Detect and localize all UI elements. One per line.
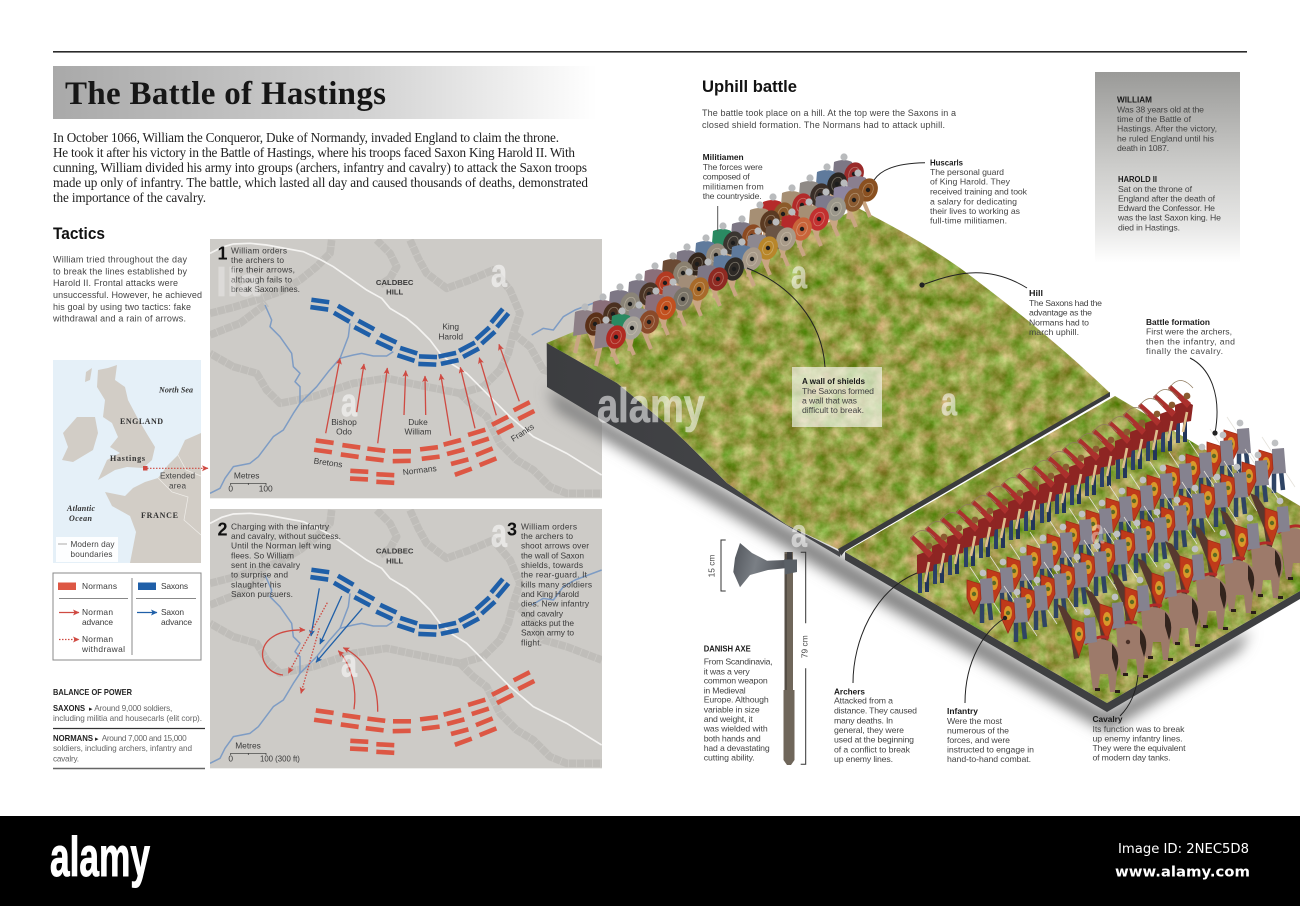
callout: militiamen: militiamen from — [703, 181, 764, 191]
harold — [1117, 175, 1221, 232]
callout: huscarls: full-time militiamen. — [930, 216, 1007, 226]
legend: Norman — [82, 634, 113, 644]
step 3 text: William orders — [521, 521, 577, 531]
callout: hill: march uphill. — [1029, 327, 1079, 337]
top rule — [53, 51, 1247, 53]
watermarks: lla — [216, 261, 261, 305]
tactics text — [52, 255, 202, 324]
saxon shield wall — [573, 153, 881, 366]
step 2 text: Until the Norman left wing — [231, 541, 331, 551]
william: time of the Battle of — [1117, 114, 1192, 124]
modern boundaries — [158, 455, 201, 535]
callout: cavalry: of modern day tanks. — [1092, 752, 1170, 762]
callout: battle formation — [1146, 318, 1235, 436]
hill label: CALDBEC — [376, 547, 414, 556]
callout: infantry: instructed to engage in — [947, 744, 1034, 754]
william: Hastings. After the victory, — [1117, 124, 1217, 134]
callout: huscarls: their lives to working as — [930, 206, 1021, 216]
heading: uphill battle: Uphill battle — [702, 78, 797, 96]
callout: militiamen: The forces were — [703, 162, 763, 172]
place names: Hastings — [110, 454, 145, 463]
step 3 text: flight. — [521, 637, 542, 647]
footer band — [0, 816, 1300, 906]
panel: map 1 — [210, 239, 602, 498]
callout: infantry: forces, and were — [947, 735, 1010, 745]
harold: HAROLD II — [1118, 175, 1157, 184]
map labels: Harold — [438, 331, 463, 341]
step 3 text: dies. New infantry — [521, 599, 590, 609]
place names: North Sea — [158, 386, 193, 394]
callout: battle formation: finally the cavalry. — [1146, 346, 1223, 356]
callout: militiamen: the countryside. — [703, 191, 762, 201]
flat block grass — [845, 396, 1300, 703]
map labels: Bishop — [331, 417, 357, 427]
modern boundaries key: boundaries — [70, 550, 112, 559]
watermarks: a — [1091, 513, 1105, 551]
callout: archers: distance. They caused — [834, 706, 917, 716]
balance of power: cavalry. — [53, 754, 79, 764]
uphill text: The battle took place on a hill. At the top were the Saxons in a — [702, 108, 956, 118]
balance of power: NORMANS — [53, 734, 93, 743]
watermarks: a — [491, 252, 508, 296]
callout: huscarls — [874, 158, 1028, 226]
map land — [62, 365, 201, 563]
callout: cavalry: Its function was to break — [1092, 724, 1185, 734]
callout: danish axe: Europe. Although — [704, 695, 769, 705]
callout: infantry: numerous of the — [947, 726, 1009, 736]
callout: archers — [834, 573, 917, 764]
intro text: He took it after his victory in the Battle of Hastings, where his troops faced Saxon King Harold II. With — [53, 145, 575, 160]
balance of power: ▸ — [95, 736, 99, 743]
step 3 text: 3 — [507, 520, 517, 540]
scale bar: 0 — [228, 754, 233, 764]
step 1 text: fire their arrows, — [231, 265, 295, 275]
harold: was the last Saxon king. He — [1117, 213, 1221, 223]
step 1 text: break Saxon lines. — [231, 284, 300, 294]
callout: archers: many deaths. In — [834, 715, 893, 725]
norman withdrawal arrows — [288, 603, 327, 693]
legend: Norman — [82, 607, 113, 617]
step 3 text: and King Harold — [521, 589, 579, 599]
map labels: Franks — [509, 421, 536, 444]
step 2 text — [218, 520, 341, 599]
balance of power: Around 9,000 soldiers, — [94, 704, 172, 713]
callout: battle formation: Battle formation — [1146, 318, 1210, 327]
panel: map 2 — [210, 509, 602, 768]
callout: cavalry: They were the equivalent — [1092, 743, 1186, 753]
step 1 text — [218, 244, 300, 294]
callout: hill: Hill — [1029, 289, 1043, 298]
uphill text — [702, 108, 956, 130]
step 3 text: Saxon army to — [521, 628, 574, 638]
step 2 text: and cavalry, without success. — [231, 531, 341, 541]
william: WILLIAM — [1117, 96, 1152, 105]
footer id: Image ID: 2NEC5D8 — [1118, 841, 1249, 857]
hill label — [376, 547, 414, 565]
scale bar: 100 (300 ft) — [260, 754, 300, 764]
norman advance arrows — [326, 344, 519, 443]
callout: militiamen — [703, 153, 764, 231]
watermarks: a — [341, 381, 358, 425]
callout: infantry: Infantry — [947, 707, 979, 716]
infantry — [967, 417, 1295, 642]
callout: archers: general, they were — [834, 725, 904, 735]
callout: huscarls: Huscarls — [930, 158, 964, 167]
place names — [66, 386, 195, 523]
legend — [53, 573, 201, 660]
callout: archers: of a conflict to break — [834, 744, 911, 754]
place names: Extended — [160, 472, 195, 480]
footer logo: alamy — [50, 825, 150, 888]
step 2 text: Charging with the infantry — [231, 521, 330, 531]
saxon advance arrows — [311, 588, 362, 662]
callout: danish axe: cutting ability. — [704, 753, 755, 763]
balance of power: soldiers, including archers, infantry and — [53, 744, 192, 753]
callout: cavalry: up enemy infantry lines. — [1092, 734, 1182, 744]
place names: FRANCE — [141, 511, 178, 520]
callout: a wall of shields — [747, 268, 882, 427]
callout: militiamen: composed of — [703, 172, 750, 182]
step 2 text: Saxon pursuers. — [231, 589, 293, 599]
flat block side — [845, 552, 1300, 712]
archers — [910, 380, 1193, 593]
callout: a wall of shields: The Saxons formed — [802, 386, 874, 396]
map labels: Duke — [408, 417, 428, 427]
harold: Sat on the throne of — [1118, 184, 1193, 194]
callout: huscarls: of King Harold. They — [930, 177, 1011, 187]
william — [1117, 96, 1217, 153]
tactics text: unsuccessful. However, he achieved — [53, 290, 202, 300]
uphill text: closed shield formation. The Normans had to attack uphill. — [702, 120, 945, 130]
watermarks — [216, 252, 1105, 686]
saxon lines — [310, 567, 510, 637]
callout: danish axe: had a devastating — [704, 743, 770, 753]
map labels: Bretons — [313, 456, 343, 469]
modern boundaries key — [56, 537, 118, 562]
callout: archers: up enemy lines. — [834, 754, 893, 764]
step 3 text: the wall of Saxon — [521, 550, 584, 560]
step 2 text: flees. So William — [231, 550, 294, 560]
step 2 text: sent in the cavalry — [231, 560, 301, 570]
tactics text: withdrawal and a rain of arrows. — [52, 314, 186, 324]
tactics text: his goal by using two tactics: fake — [53, 302, 191, 312]
hill top grass — [547, 208, 1110, 550]
callout: a wall of shields: a wall that was — [802, 396, 858, 406]
place names: Ocean — [69, 514, 93, 523]
dimension: 15 cm — [706, 540, 726, 591]
step 3 text: attacks put the — [521, 618, 574, 628]
intro text: made up only of infantry. The battle, which lasted all day and caused thousands of deaths, demonstrated — [53, 175, 588, 190]
scale bar: 100 — [259, 484, 273, 494]
step 1 text: the archers to — [231, 255, 284, 265]
tactics text: Harold II. Frontal attacks were — [53, 278, 178, 288]
callout: danish axe: and weight, it — [704, 714, 753, 724]
step 1 text: although fails to — [231, 274, 292, 284]
watermarks: a — [791, 253, 808, 297]
william: he ruled England until his — [1117, 133, 1215, 143]
callout: hill: The Saxons had the — [1029, 298, 1102, 308]
callout: infantry — [947, 616, 1034, 764]
cavalry — [1057, 493, 1300, 693]
callout: danish axe: in Medieval — [704, 685, 746, 695]
callout: danish axe: DANISH AXE — [704, 645, 751, 654]
balance of power: ▸ — [89, 706, 93, 713]
step 3 text: the archers to — [521, 531, 573, 541]
callout: danish axe — [703, 645, 773, 763]
callout: a wall of shields: A wall of shields — [802, 377, 866, 386]
legend: advance — [161, 617, 192, 627]
map labels: CALDBEC — [376, 278, 414, 287]
callout: archers: Attacked from a — [834, 696, 893, 706]
locator map — [53, 360, 208, 563]
step 2 text: to surprise and — [231, 570, 288, 580]
hill label: HILL — [386, 556, 404, 565]
hastings arrow — [143, 466, 208, 470]
step 1 text: William orders — [231, 245, 287, 255]
callout: danish axe: common weapon — [704, 676, 768, 686]
diorama — [547, 153, 1300, 732]
map labels: HILL — [386, 287, 404, 296]
callout: huscarls: received training and took — [930, 187, 1028, 197]
callout: archers: Archers — [834, 687, 866, 696]
saxon lines — [310, 297, 510, 367]
shadow — [547, 387, 1250, 732]
map labels: William — [405, 426, 432, 436]
map labels: Normans — [402, 463, 437, 477]
callout: danish axe: was wielded with — [703, 724, 768, 734]
step 3 text: and cavalry — [521, 608, 564, 618]
watermarks: a — [791, 512, 808, 556]
callout: battle formation: First were the archers, — [1146, 327, 1232, 337]
balance of power: including militia and housecarls (elit corp). — [53, 714, 202, 723]
harold: died in Hastings. — [1118, 222, 1180, 232]
william: Was 38 years old at the — [1117, 104, 1204, 114]
modern boundaries key: Modern day — [70, 540, 115, 549]
step 3 text: the rear-guard. It — [521, 570, 588, 580]
intro text: In October 1066, William the Conqueror, Duke of Normandy, invaded England to claim the throne. — [53, 130, 559, 145]
callout: hill: Normans had to — [1029, 317, 1089, 327]
callout: danish axe: it was a very — [704, 666, 750, 676]
harold: England after the death of — [1118, 194, 1216, 204]
legend: Saxon — [161, 607, 184, 617]
map labels — [313, 278, 536, 477]
scale bar: Metres — [234, 470, 260, 480]
title — [53, 66, 597, 119]
norman curved arrows — [263, 630, 378, 712]
balance of power: BALANCE OF POWER — [53, 688, 132, 697]
tactics text: William tried throughout the day — [53, 255, 188, 265]
tactics text: to break the lines established by — [53, 266, 188, 276]
icon: danish axe — [733, 543, 797, 765]
step 2 text: 2 — [218, 520, 228, 540]
callout: militiamen: Militiamen — [703, 153, 744, 162]
norman lines — [314, 670, 535, 755]
hill side wall — [547, 343, 840, 557]
william: death in 1087. — [1117, 143, 1169, 153]
balance of power: SAXONS — [53, 704, 85, 713]
harold: Edward the Confessor. He — [1118, 203, 1215, 213]
place names: Atlantic — [66, 504, 95, 513]
step 3 text: shoot arrows over — [521, 541, 589, 551]
step 3 text: shields, towards — [521, 560, 583, 570]
legend: advance — [82, 617, 113, 627]
callout: danish axe: both hands and — [704, 733, 761, 743]
callout: hill: advantage as the — [1029, 308, 1092, 318]
scale bar: 0 — [228, 484, 233, 494]
gap between blocks — [838, 392, 1110, 556]
intro text — [53, 130, 588, 205]
watermarks: a — [341, 642, 358, 686]
balance of power — [53, 688, 205, 768]
map labels: King — [442, 322, 459, 332]
legend: withdrawal — [81, 644, 125, 654]
step 3 text: kills many soldiers — [521, 579, 592, 589]
intro text: the importance of the cavalry. — [53, 190, 206, 205]
step 2 text: slaughter his — [231, 579, 281, 589]
scale bar: Metres — [235, 740, 261, 750]
callout: huscarls: a salary for dedicating — [930, 196, 1017, 206]
callout: battle formation: then the infantry, and — [1146, 336, 1235, 346]
balance of power: Around 7,000 and 15,000 — [102, 734, 187, 743]
callout: a wall of shields: difficult to break. — [802, 405, 864, 415]
title: The Battle of Hastings — [65, 76, 386, 112]
callout: infantry: Were the most — [947, 716, 1003, 726]
dimension: 79 cm: 79 cm — [800, 635, 810, 658]
watermarks: alamy — [597, 380, 705, 433]
dimension: 79 cm — [800, 552, 810, 764]
dimension: 15 cm: 15 cm — [706, 555, 716, 577]
norman lines — [314, 400, 535, 485]
scale bar — [228, 470, 273, 494]
callout: cavalry — [1092, 640, 1186, 762]
heading: tactics: Tactics — [53, 225, 105, 243]
intro text: cunning, William divided his army into groups (archers, infantry and cavalry) to attack the Saxon troops — [53, 160, 587, 175]
step 1 text: 1 — [218, 244, 228, 264]
callout: infantry: hand-to-hand combat. — [947, 754, 1031, 764]
callout: huscarls: The personal guard — [930, 167, 1004, 177]
legend: Normans — [82, 581, 117, 591]
scale bar — [228, 740, 300, 764]
step 3 text — [507, 520, 592, 647]
callout: danish axe: variable in size — [704, 704, 760, 714]
footer url: www.alamy.com — [1115, 865, 1250, 881]
map labels: Odo — [336, 426, 352, 436]
callout: danish axe: From Scandinavia, — [704, 656, 773, 666]
place names: ENGLAND — [120, 417, 163, 426]
watermarks: a — [941, 380, 958, 424]
callout: archers: used at the beginning — [834, 735, 914, 745]
panel: william and harold — [1095, 72, 1240, 263]
callout: hill — [919, 273, 1102, 337]
legend: Saxons — [161, 581, 188, 591]
callout: cavalry: Cavalry — [1092, 715, 1123, 724]
watermarks: a — [491, 512, 508, 556]
place names: area — [169, 482, 186, 490]
